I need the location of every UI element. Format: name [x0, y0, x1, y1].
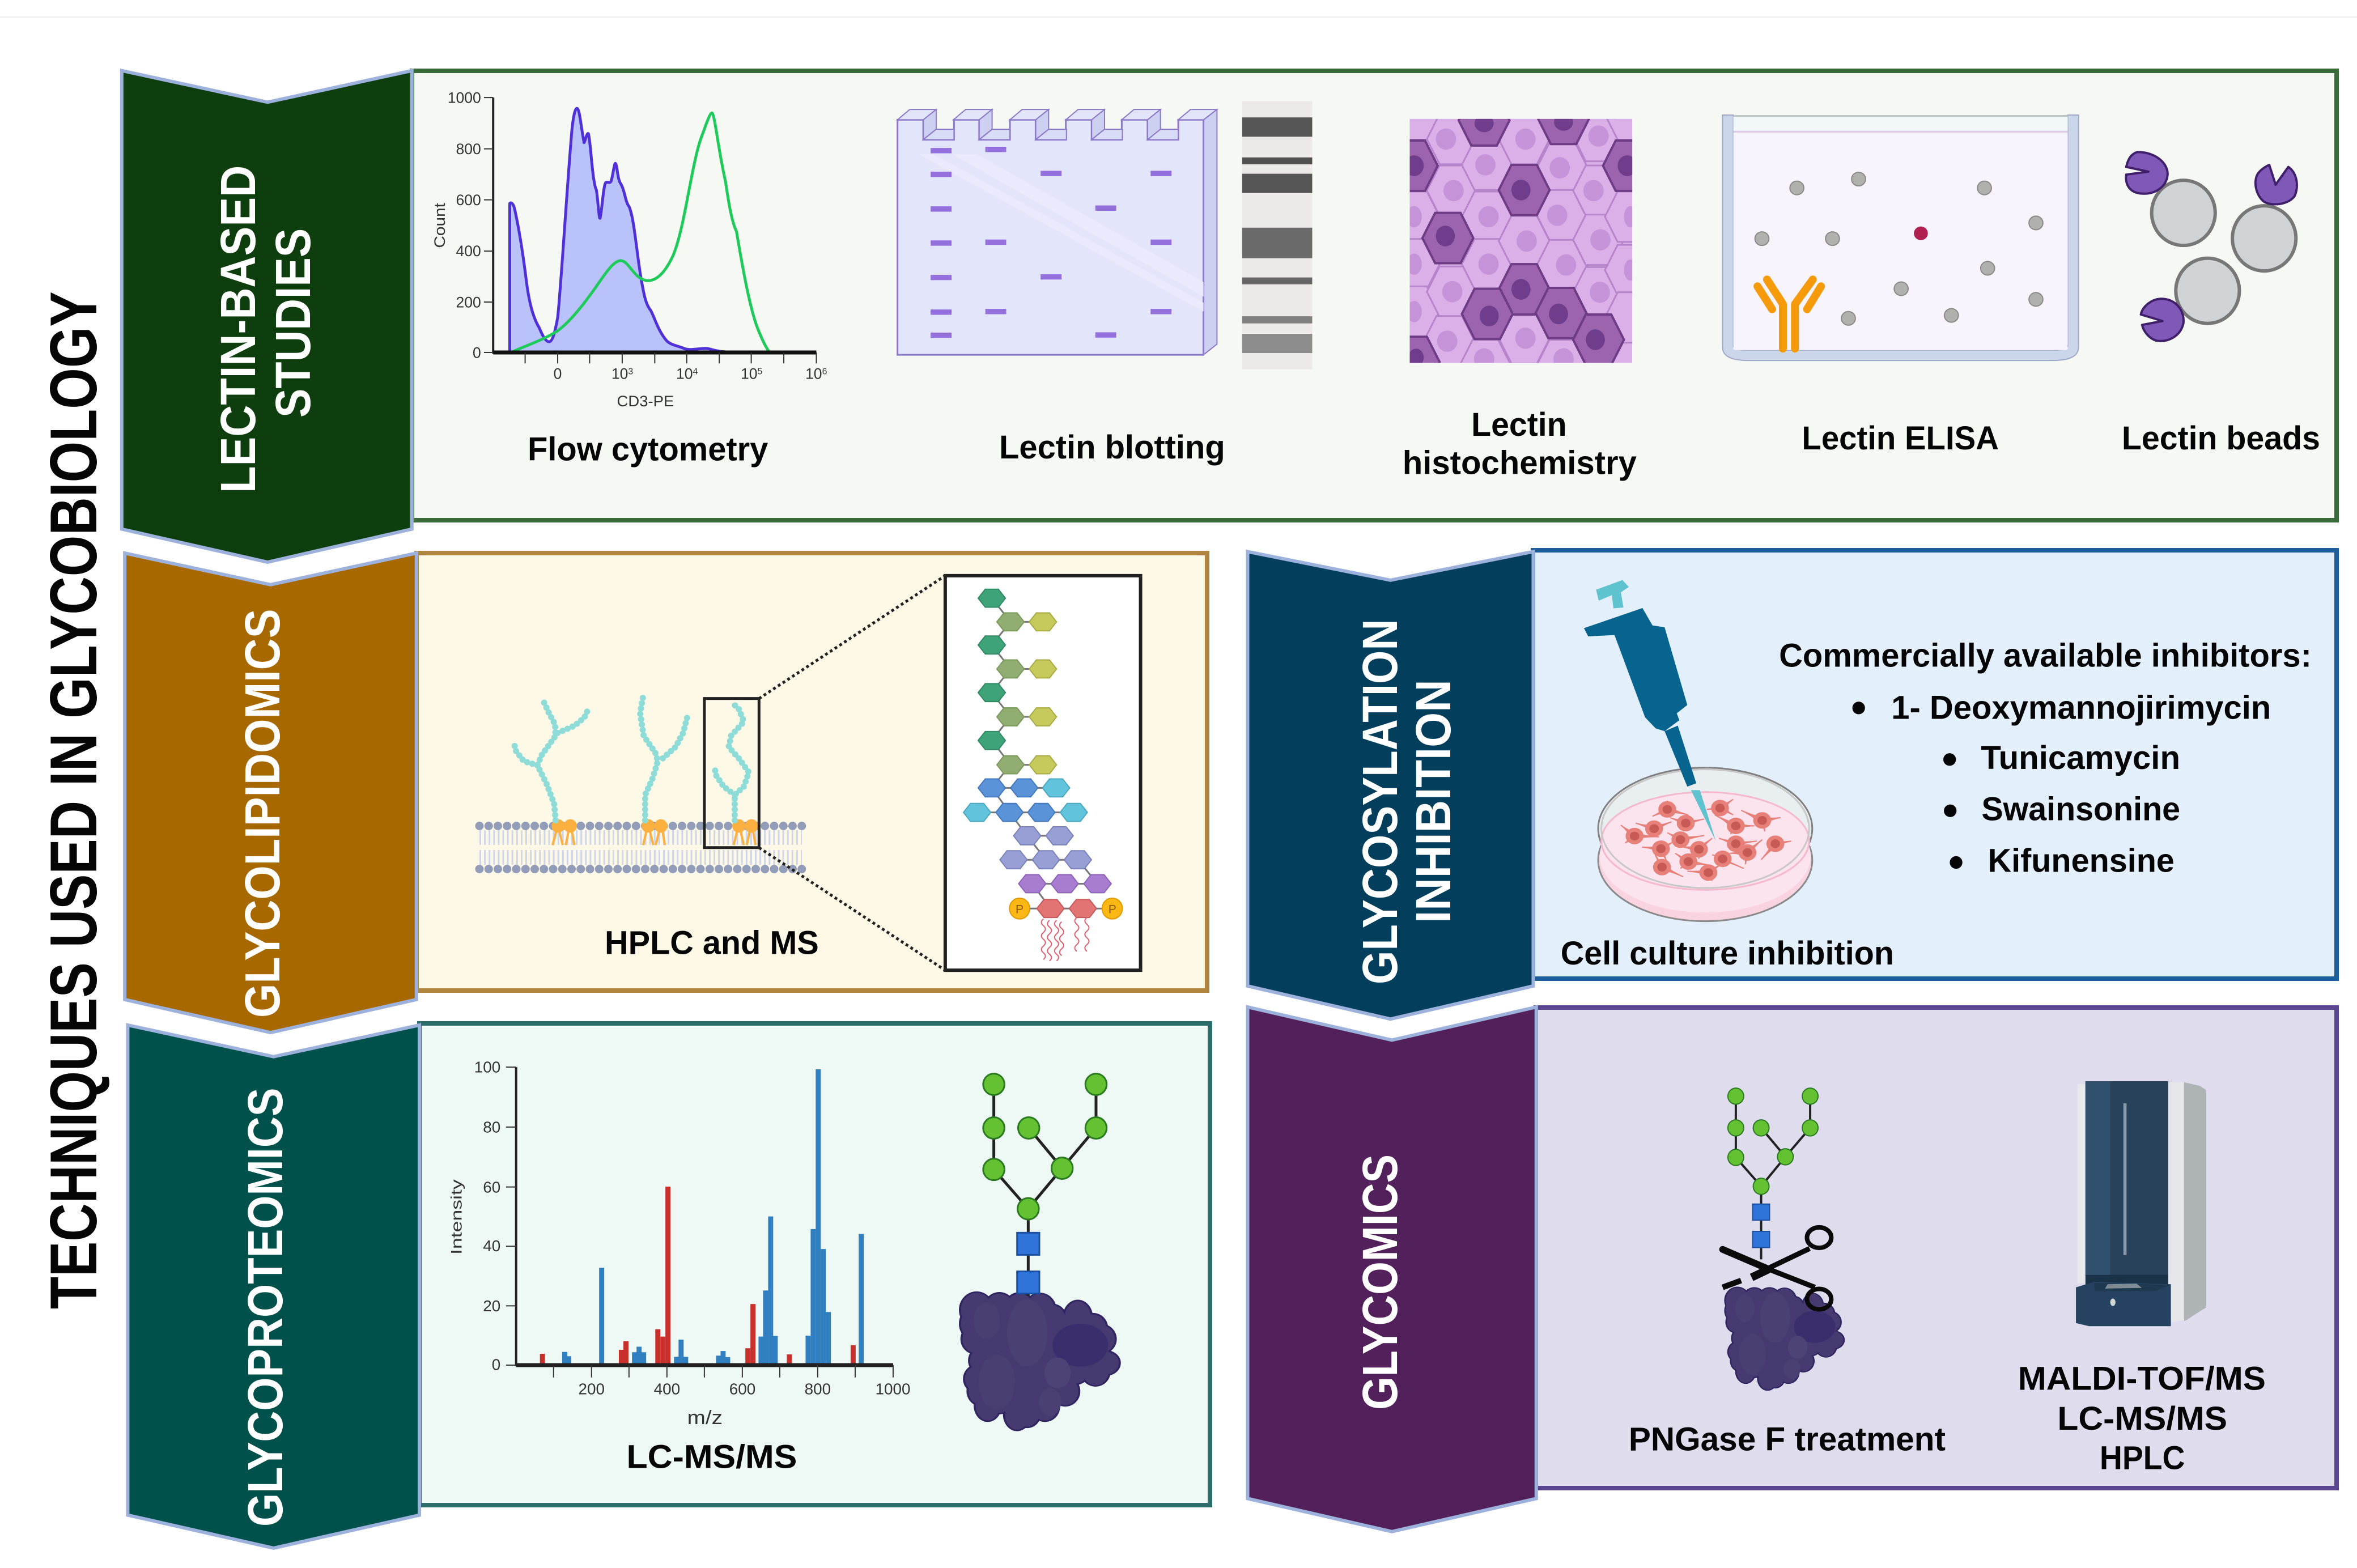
method labels: glycomics: HPLC: [2100, 1439, 2185, 1476]
banner: lectin-based studies: STUDIES: [265, 228, 321, 418]
method labels: glycomics: PNGase F treatment: [1629, 1421, 1946, 1458]
mass spectrum chart: 0: [492, 1356, 500, 1374]
mass spectrum chart: 60: [483, 1179, 500, 1196]
target molecule: [1914, 227, 1928, 240]
flow cytometry chart: 10: [676, 365, 693, 382]
method labels: glycomics: MALDI-TOF/MS: [2018, 1361, 2266, 1397]
inset: glycolipid structure: [945, 576, 1141, 970]
flow cytometry chart: 0: [473, 344, 481, 361]
title: TECHNIQUES USED IN GLYCOBIOLOGY: [36, 291, 111, 1309]
mass spectrum chart: Intensity: [448, 1179, 465, 1255]
flow cytometry chart: [431, 90, 827, 410]
antibody: [1757, 279, 1821, 349]
banner: lectin-based studies: [122, 71, 412, 562]
flow cytometry chart: 4: [693, 367, 698, 376]
panel background: lectin-based studies: [412, 71, 2337, 520]
method labels: glycomics: [1629, 1361, 2266, 1476]
method labels: glycomics: LC-MS/MS: [2057, 1400, 2227, 1437]
mass spectrum chart: [448, 1058, 911, 1429]
flow cytometry chart: 3: [628, 367, 633, 376]
flow cytometry chart: 400: [456, 243, 481, 260]
flow cytometry chart: 200: [456, 294, 481, 311]
panel background: glycosylation inhibition: [1533, 550, 2337, 979]
mass spectrum chart: 20: [483, 1297, 500, 1315]
method labels: lectin row: histochemistry: [1403, 445, 1637, 482]
banner: glycolipidomics: GLYCOLIPIDOMICS: [235, 609, 290, 1018]
culture dish with cells: [1598, 768, 1812, 921]
inhibitors list: Kifunensine: [1988, 842, 2175, 879]
flow cytometry chart: 800: [456, 141, 481, 158]
mass spectrum chart: 100: [474, 1058, 500, 1076]
mass spectrum chart: 800: [805, 1380, 831, 1398]
pipette: [1584, 580, 1716, 841]
flow cytometry chart: 0: [554, 365, 562, 382]
phosphate labels: [1016, 903, 1116, 916]
banner: lectin-based studies: LECTIN-BASED: [210, 165, 266, 493]
mass spectrum chart: 40: [483, 1237, 500, 1255]
method labels: lectin row: Lectin blotting: [999, 429, 1225, 466]
flow cytometry chart: CD3-PE: [617, 393, 674, 410]
icon: scissors: [1723, 1227, 1831, 1310]
banner: glycolipidomics: [125, 553, 417, 1032]
inhibitors list: Swainsonine: [1981, 791, 2180, 828]
panel background: glycoproteomics: [419, 1023, 1210, 1505]
mass spectrum chart: 80: [483, 1119, 500, 1136]
method label: HPLC and MS: HPLC and MS: [605, 925, 819, 962]
phosphate labels: P: [1016, 903, 1024, 916]
banner: glycoproteomics: GLYCOPROTEOMICS: [237, 1087, 293, 1527]
method labels: lectin row: Lectin ELISA: [1802, 420, 1999, 457]
phosphate labels: P: [1109, 903, 1116, 916]
panel: glycosylation inhibition: [1247, 550, 2337, 1019]
mass spectrum chart: 200: [578, 1380, 605, 1398]
flow cytometry chart: 10: [741, 365, 758, 382]
flow cytometry chart: 6: [822, 367, 827, 376]
glycoprotein: N-glycan on protein: [959, 1074, 1121, 1431]
gel lane strip: [1242, 101, 1312, 369]
panel: glycoproteomics: [128, 1023, 1210, 1548]
panel: lectin-based studies: [122, 71, 2337, 562]
method label: cell culture inhibition: Cell culture inhibition: [1561, 935, 1894, 972]
lectin blot membrane: [898, 109, 1217, 355]
N-glycan tree: [1728, 1088, 1818, 1259]
mass spectrum chart: m/z: [687, 1407, 723, 1429]
flow cytometry chart: 10: [805, 365, 822, 382]
cell membrane bilayer: [479, 819, 802, 869]
method labels: lectin row: Lectin beads: [2122, 420, 2320, 457]
method label: LC-MS/MS: LC-MS/MS: [627, 1439, 797, 1476]
inhibitors list: 1- Deoxymannojirimycin: [1891, 689, 2271, 726]
glycan chains on membrane: [514, 694, 749, 821]
panel background: glycolipidomics: [417, 553, 1207, 991]
panel background: glycomics: [1536, 1008, 2337, 1488]
flow cytometry chart: Count: [431, 202, 448, 248]
panel: glycomics: [1247, 1007, 2337, 1532]
flow cytometry chart: 5: [758, 367, 763, 376]
N-glycan tree: [983, 1074, 1107, 1296]
protein blob: [959, 1291, 1121, 1431]
protein blob: [1724, 1287, 1845, 1391]
method labels: lectin row: [528, 406, 2320, 482]
mass spectrum chart: 600: [729, 1380, 755, 1398]
ELISA well: [1722, 115, 2079, 360]
flow cytometry chart: 10: [611, 365, 628, 382]
glycolipid anchors: [551, 819, 758, 845]
flow cytometry chart: 600: [456, 192, 481, 209]
banner: glycosylation inhibition: [1247, 551, 1533, 1019]
selection box and zoom lines: [704, 576, 945, 970]
banner: glycomics: [1247, 1007, 1536, 1532]
banner: glycosylation inhibition: INHIBITION: [1405, 679, 1461, 923]
method labels: lectin row: Flow cytometry: [528, 431, 768, 468]
mass spectrum chart: 400: [654, 1380, 680, 1398]
inhibitors list: Commercially available inhibitors:: [1779, 637, 2312, 674]
method labels: lectin row: Lectin: [1471, 406, 1567, 443]
banner: glycomics: GLYCOMICS: [1352, 1154, 1408, 1410]
lectin beads: [2126, 152, 2297, 341]
flow cytometry chart: 1000: [448, 90, 481, 107]
banner: glycoproteomics: [128, 1025, 419, 1548]
inhibitors list: [1779, 637, 2312, 879]
inhibitors list: Tunicamycin: [1981, 740, 2180, 776]
panel: glycolipidomics: [125, 553, 1207, 1032]
banner: glycosylation inhibition: GLYCOSYLATION: [1352, 619, 1408, 984]
mass spectrum chart: 1000: [876, 1380, 911, 1398]
MALDI-TOF instrument: [2076, 1081, 2206, 1326]
histochemistry tissue: [1410, 119, 1632, 363]
